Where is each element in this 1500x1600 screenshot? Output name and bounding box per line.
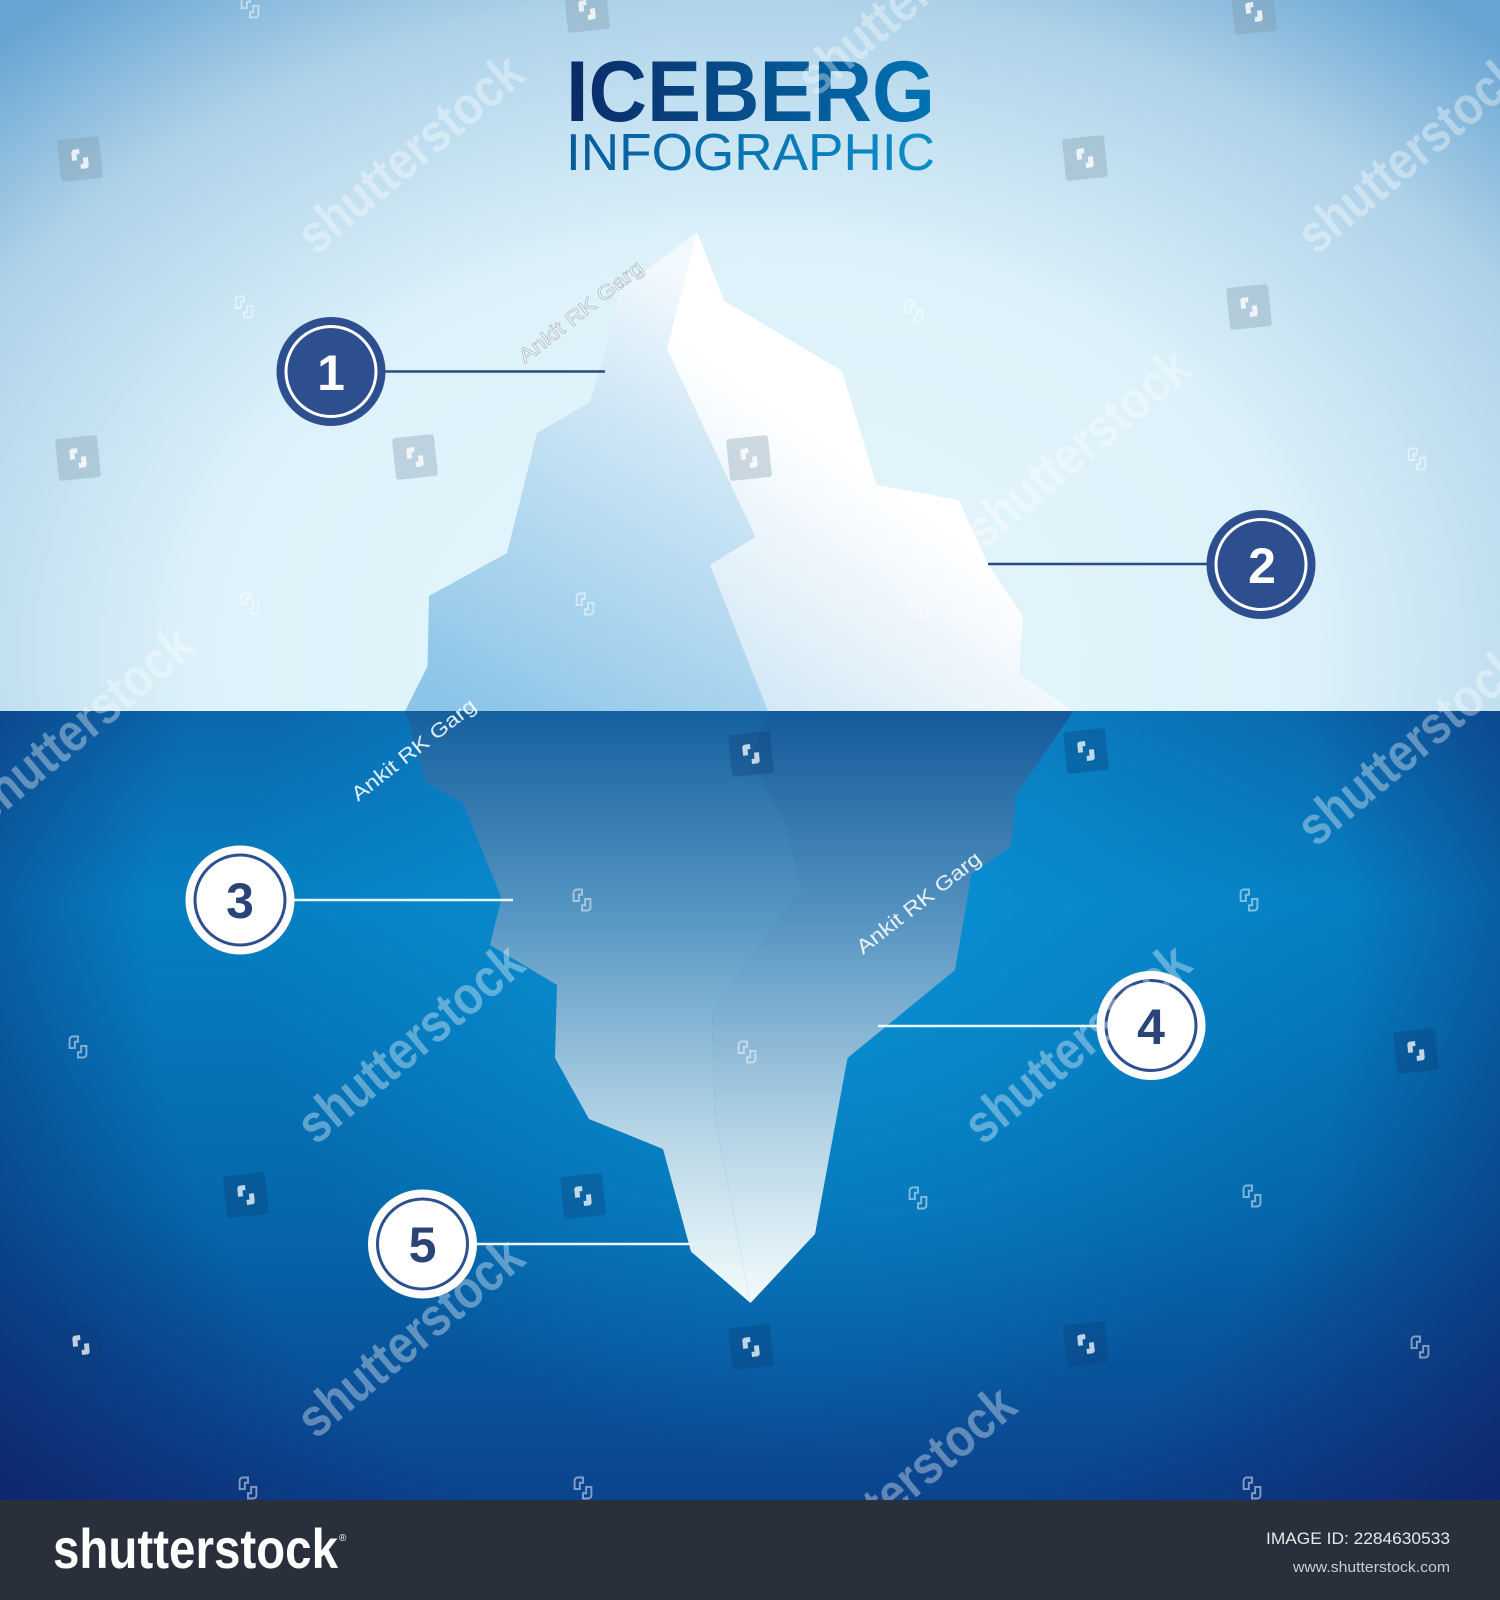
iceberg above water <box>405 232 1074 711</box>
watermark: stock wordmarks: shutterstock <box>952 931 1203 1155</box>
callout 3: 3 <box>226 873 254 929</box>
sky background <box>0 0 1500 711</box>
callout 2 <box>988 510 1316 619</box>
iceberg below water <box>405 711 1074 1303</box>
watermark: filled square marks in ocean <box>58 728 1439 1370</box>
shaded left facet <box>405 232 768 711</box>
callout 3 <box>186 846 513 954</box>
title line: infographic: INFOGRAPHIC <box>566 124 935 182</box>
lit right facet <box>667 232 1074 711</box>
footer logo: shutterstock <box>53 1517 339 1580</box>
author credit labels: Ankit RK Garg <box>348 695 481 806</box>
title <box>566 44 935 182</box>
watermark: stock wordmarks: shutterstock <box>285 931 536 1155</box>
footer site url: www.shutterstock.com <box>1292 1559 1450 1576</box>
callout 2: 2 <box>1248 538 1276 594</box>
watermark: stock wordmarks: shutterstock <box>777 1373 1028 1597</box>
author credit labels <box>348 257 986 959</box>
right underwater facet <box>712 711 1074 1303</box>
ocean background <box>0 711 1500 1500</box>
author credit labels: Ankit RK Garg <box>853 848 986 959</box>
callout 1 <box>276 317 605 426</box>
watermark: stock wordmarks: shutterstock <box>285 41 536 265</box>
footer bar <box>0 1500 1500 1600</box>
footer registered mark: ® <box>339 1533 347 1544</box>
title line: iceberg: ICEBERG <box>566 44 935 140</box>
watermark: stock wordmarks: shutterstock <box>285 1225 536 1449</box>
callout 5: 5 <box>409 1217 436 1273</box>
watermark: stock wordmarks: shutterstock <box>952 336 1203 560</box>
callout 4: 4 <box>1137 999 1165 1055</box>
callout 5 <box>368 1190 695 1298</box>
callout 4 <box>878 971 1206 1080</box>
footer image id: IMAGE ID: 2284630533 <box>1266 1529 1450 1548</box>
left underwater facet <box>405 711 802 1303</box>
author credit labels: Ankit RK Garg <box>515 257 648 368</box>
callout 1: 1 <box>317 345 345 401</box>
watermark: filled square marks in sky <box>55 0 1277 481</box>
